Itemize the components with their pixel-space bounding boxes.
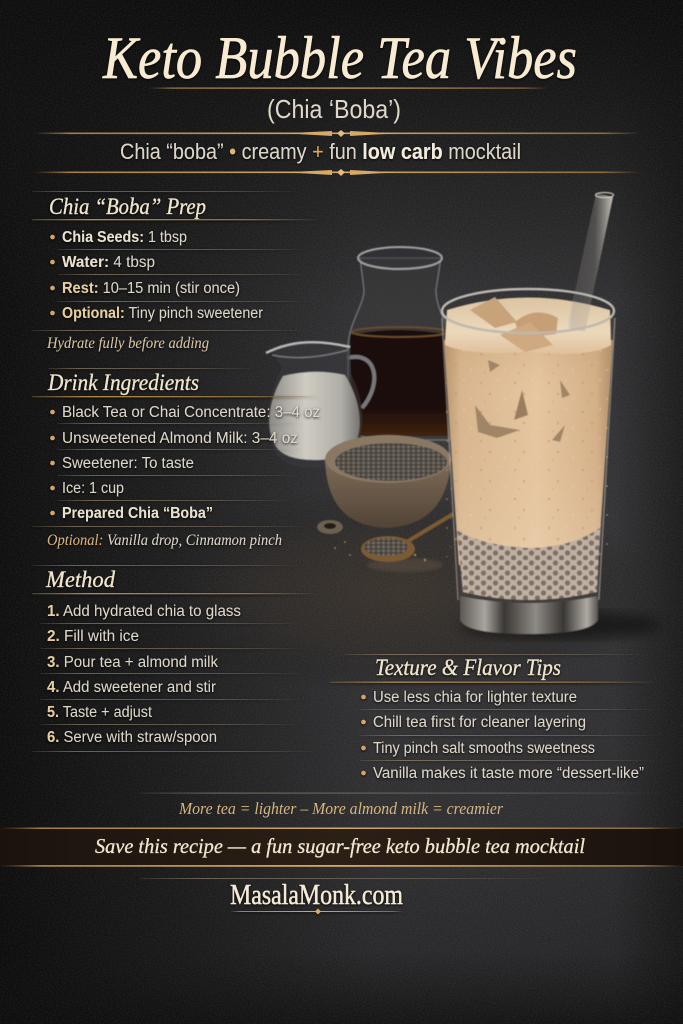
panel: method [32, 565, 322, 752]
bowl of chia seeds [325, 435, 451, 528]
subtitle: (Chia ‘Boba’) [267, 94, 401, 124]
spoon and scattered seeds [317, 514, 453, 572]
panel: texture and flavor tips [330, 654, 660, 782]
panel: method: 3. Pour tea + almond milk [47, 654, 218, 671]
panel: texture and flavor tips: Use less chia for lighter texture [373, 689, 577, 706]
tall glass with milk tea [442, 192, 615, 634]
ice cubes in milk [475, 360, 570, 442]
straw [567, 192, 614, 332]
panel: chia boba prep: Chia Seeds: 1 tbsp [62, 229, 187, 246]
panel: drink ingredients: Black Tea or Chai Concentrate: 3–4 oz [62, 404, 320, 421]
panel: chia boba prep: Optional: Tiny pinch sweetener [62, 305, 263, 322]
glass rim [442, 289, 614, 333]
boba layer [457, 528, 600, 600]
heading: chia boba prep: Chia “Boba” Prep [49, 194, 206, 219]
ratio note: More tea = lighter – More almond milk = creamier [178, 799, 503, 818]
pitcher of almond milk [266, 342, 374, 468]
panel: drink ingredients: Unsweetened Almond Milk: 3–4 oz [62, 430, 298, 447]
panel: drink ingredients [32, 368, 320, 549]
brand: masalamonk.com: MasalaMonk.com [230, 879, 403, 911]
ornament divider bottom [33, 169, 640, 176]
glass shadow [460, 611, 660, 639]
panel: method: 5. Taste + adjust [47, 704, 153, 721]
panel: chia boba prep: Water: 4 tbsp [62, 254, 155, 271]
photo: bubble tea still life [266, 192, 660, 639]
tagline: Chia “boba” • creamy + fun low carb mocktail [120, 139, 521, 164]
save banner [0, 828, 683, 867]
glass base [460, 596, 598, 634]
panel: drink ingredients: Ice: 1 cup [62, 480, 124, 497]
ice and foam [445, 297, 611, 354]
panel: texture and flavor tips: Chill tea first for cleaner layering [373, 714, 586, 731]
carafe of black tea [348, 247, 450, 440]
title: Keto Bubble Tea Vibes [102, 25, 577, 91]
panel: method: 2. Fill with ice [47, 628, 139, 645]
panel: drink ingredients: Optional: Vanilla drop, Cinnamon pinch [47, 532, 282, 549]
ornament divider top [33, 130, 640, 137]
panel: texture and flavor tips: Tiny pinch salt smooths sweetness [373, 740, 595, 757]
heading: texture and flavor tips: Texture & Flavor Tips [375, 655, 561, 680]
panel: chia boba prep [32, 191, 320, 352]
panel: texture and flavor tips: Vanilla makes it taste more “dessert-like” [373, 765, 644, 782]
heading: method: Method [45, 567, 115, 592]
panel: chia boba prep: Hydrate fully before adding [46, 335, 209, 352]
panel: method: 4. Add sweetener and stir [47, 679, 216, 696]
panel: drink ingredients: Sweetener: To taste [62, 455, 194, 472]
panel: method: 6. Serve with straw/spoon [47, 729, 217, 746]
save banner: Save this recipe — a fun sugar-free keto bubble tea mocktail [95, 834, 585, 858]
panel: chia boba prep: Rest: 10–15 min (stir once) [62, 280, 240, 297]
heading: drink ingredients: Drink Ingredients [47, 370, 199, 395]
panel: drink ingredients: Prepared Chia “Boba” [62, 505, 213, 522]
panel: method: 1. Add hydrated chia to glass [47, 603, 241, 620]
